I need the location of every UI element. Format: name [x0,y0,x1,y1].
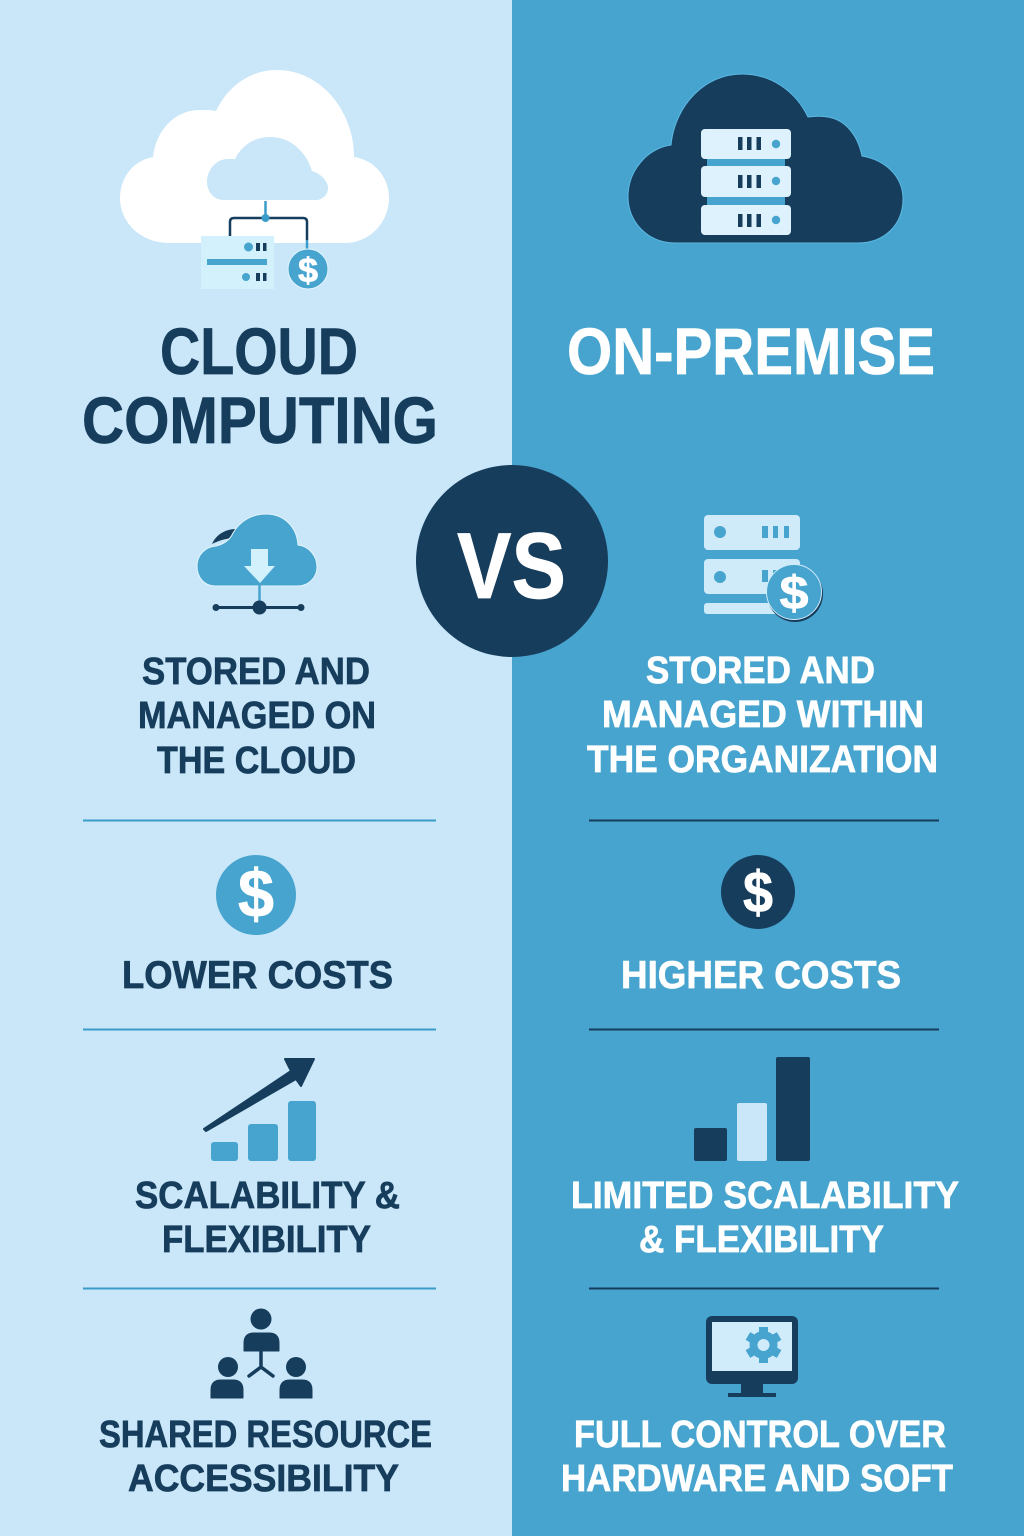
icon: cloud download network [197,514,317,614]
text: limited scalability and flexibility: & FLEXIBILITY [639,1219,884,1261]
icon: dollar coin dark: $ [743,860,773,925]
icon: dollar coin light: $ [238,856,274,932]
text: stored and managed within the organization [587,650,938,781]
icon: servers with dollar coin [704,515,823,622]
text: shared resource accessibility: SHARED RESOURCE [99,1414,432,1456]
icon: large white cloud with server and dollar: $ [298,252,318,290]
panel: on-premise background [512,0,1024,1536]
text: scalability and flexibility: SCALABILITY & [135,1175,400,1217]
heading: cloud computing: CLOUD [160,314,358,388]
vs badge [416,465,608,657]
text: lower costs: LOWER COSTS [122,954,393,997]
text: full control over hardware and soft: HARDWARE AND SOFT [561,1458,953,1500]
text: higher costs: HIGHER COSTS [621,954,901,997]
icon: monitor with gear [706,1316,798,1397]
text: shared resource accessibility: ACCESSIBILITY [128,1458,399,1500]
text: full control over hardware and soft [561,1414,953,1500]
text: stored and managed on the cloud: STORED AND [142,651,370,693]
text: shared resource accessibility [99,1414,432,1500]
text: full control over hardware and soft: FULL CONTROL OVER [574,1414,946,1456]
icon: limited bars [694,1057,810,1161]
text: stored and managed within the organization: MANAGED WITHIN [602,694,924,736]
icon: shared users network [211,1308,312,1398]
text: stored and managed on the cloud [138,651,376,782]
icon: dark cloud with server stack [628,74,903,243]
icon: servers with dollar coin: $ [780,566,808,619]
icon: large white cloud with server and dollar [120,70,389,290]
icon: dollar coin light [216,855,296,935]
text: scalability and flexibility [135,1175,400,1261]
panel: cloud computing background [0,0,512,1536]
heading: on-premise: ON-PREMISE [567,314,935,388]
icon: dollar coin dark [721,855,795,929]
text: stored and managed within the organization: STORED AND [646,650,875,692]
text: limited scalability and flexibility: LIMITED SCALABILITY [571,1175,959,1217]
heading: cloud computing: COMPUTING [82,383,438,457]
text: stored and managed on the cloud: THE CLOUD [157,740,356,782]
text: stored and managed within the organization: THE ORGANIZATION [587,739,938,781]
heading: cloud computing [82,314,438,457]
text: limited scalability and flexibility [571,1175,959,1261]
vs badge: VS [457,513,566,618]
text: scalability and flexibility: FLEXIBILITY [162,1219,371,1261]
text: stored and managed on the cloud: MANAGED ON [138,695,376,737]
icon: growth bars with arrow [204,1059,316,1161]
